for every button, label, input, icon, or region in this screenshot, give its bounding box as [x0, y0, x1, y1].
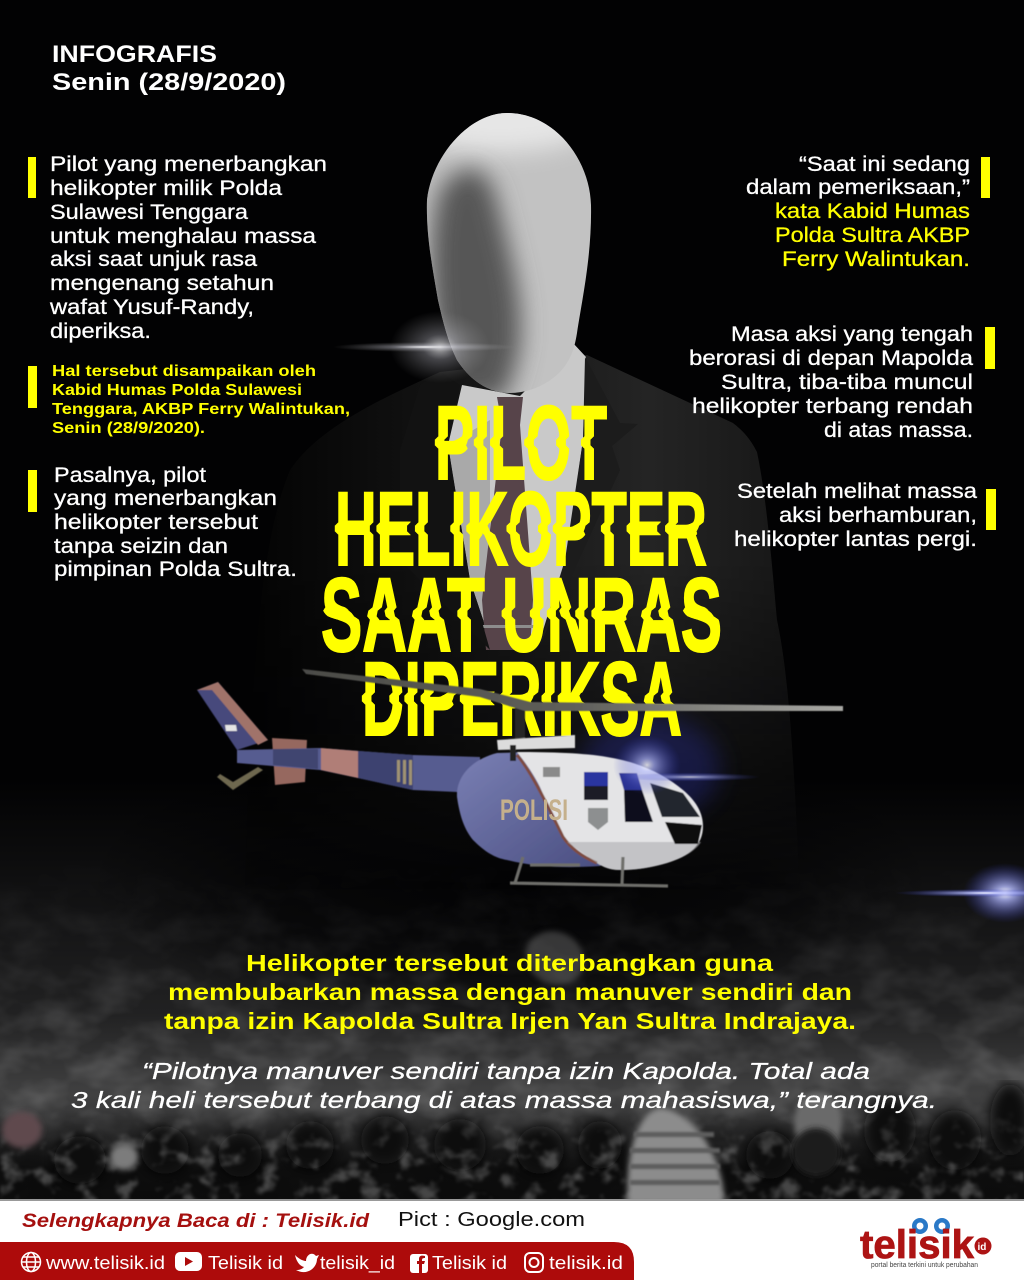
right text block 2: di atas massa. — [824, 419, 973, 442]
footer panel — [0, 1199, 1024, 1280]
right text block 3: Setelah melihat massa — [737, 480, 977, 503]
right text block 3: aksi berhamburan, — [779, 504, 977, 527]
vent and crest — [543, 767, 560, 777]
social bar — [0, 1242, 634, 1280]
main title: HELIKOPTER — [335, 471, 707, 588]
footer panel: telisik.id — [549, 1253, 623, 1273]
left text block 3: pimpinan Polda Sultra. — [54, 558, 297, 581]
left text block 2 yellow — [28, 363, 350, 437]
footer panel: Telisik id — [432, 1253, 507, 1273]
telisik logo: telisik — [860, 1223, 975, 1267]
header: infografis date: INFOGRAFIS — [52, 41, 217, 68]
lapel right — [540, 357, 638, 645]
helicopter blue flare — [613, 735, 760, 795]
telisik logo: id — [978, 1242, 986, 1253]
left text block 2 yellow: Senin (28/9/2020). — [52, 420, 205, 437]
icon: globe — [21, 1252, 41, 1272]
belly shade — [567, 842, 701, 870]
lens flare near head — [333, 311, 517, 383]
faceless head — [426, 113, 592, 393]
tie clip — [482, 625, 534, 628]
right text block 2: Sultra, tiba-tiba muncul — [721, 371, 973, 394]
fuselage stripe — [517, 755, 597, 863]
right text block 2 — [689, 323, 995, 442]
windows — [584, 772, 608, 786]
left text block 1: wafat Yusuf-Randy, — [49, 296, 254, 319]
blue flare right edge — [895, 863, 1024, 923]
bottom italic quote: “Pilotnya manuver sendiri tanpa izin Kapolda. Total ada — [142, 1058, 870, 1084]
lapel left — [400, 372, 490, 650]
bottom italic quote: 3 kali heli tersebut terbang di atas massa mahasiswa,” terangnya. — [71, 1087, 937, 1113]
right text block 3: helikopter lantas pergi. — [734, 528, 977, 551]
left text block 1: untuk menghalau massa — [50, 225, 316, 248]
rotor blade — [302, 669, 843, 711]
left text block 1 — [28, 153, 327, 343]
bottom italic quote — [71, 1058, 937, 1113]
icon: twitter — [295, 1254, 319, 1272]
left text block 3 — [28, 464, 297, 581]
right text block 3 — [734, 480, 996, 551]
right text block 1 quote: Polda Sultra AKBP — [775, 224, 970, 247]
footer panel: Telisik id — [208, 1253, 283, 1273]
tail fin — [197, 682, 268, 750]
left text block 1: helikopter milik Polda — [50, 177, 282, 200]
bottom yellow statement: tanpa izin Kapolda Sultra Irjen Yan Sultra Indrajaya. — [164, 1008, 856, 1034]
left text block 2 yellow: Tenggara, AKBP Ferry Walintukan, — [52, 401, 350, 418]
header: infografis date — [52, 41, 286, 96]
helicopter illustration — [197, 669, 843, 886]
right text block 2: helikopter terbang rendah — [692, 395, 973, 418]
left text block 2 yellow: Kabid Humas Polda Sulawesi — [52, 382, 302, 399]
left text block 1: Sulawesi Tenggara — [50, 201, 248, 224]
telisik logo: portal berita terkini untuk perubahan — [871, 1262, 978, 1269]
footer panel: telisik_id — [320, 1253, 395, 1274]
main title: PILOT — [435, 385, 607, 502]
left text block 1: aksi saat unjuk rasa — [50, 248, 257, 271]
right text block 1 quote: “Saat ini sedang — [799, 153, 970, 176]
left text block 1: mengenang setahun — [50, 272, 274, 295]
bottom yellow statement — [164, 950, 856, 1034]
read more link: Selengkapnya Baca di : Telisik.id — [22, 1211, 369, 1232]
bottom yellow statement: membubarkan massa dengan manuver sendiri dan — [168, 979, 852, 1005]
icon: facebook — [410, 1254, 428, 1273]
left text block 3: yang menerbangkan — [54, 487, 277, 510]
white nose — [517, 752, 703, 870]
main title — [321, 385, 722, 758]
footer panel: www.telisik.id — [45, 1253, 165, 1273]
main title: DIPERIKSA — [362, 641, 682, 758]
rotor mast — [515, 708, 525, 738]
crowd photo background — [0, 842, 1024, 1199]
left text block 1: diperiksa. — [50, 320, 151, 343]
suit jacket — [336, 355, 793, 792]
icon: instagram — [525, 1253, 543, 1272]
POLISI label: POLISI — [500, 794, 568, 827]
right text block 1 quote: dalam pemeriksaan,” — [746, 176, 970, 199]
left text block 3: helikopter tersebut — [54, 511, 258, 534]
left text block 2 yellow: Hal tersebut disampaikan oleh — [52, 363, 316, 380]
cabin top — [497, 735, 575, 750]
stabilizer — [272, 738, 307, 785]
icon: youtube — [175, 1252, 202, 1271]
person in suit — [245, 92, 800, 900]
shirt — [448, 343, 586, 640]
right text block 1 quote — [746, 153, 990, 271]
right text block 2: Masa aksi yang tengah — [731, 323, 973, 346]
tail boom — [237, 748, 480, 795]
right text block 1 quote: kata Kabid Humas — [775, 200, 970, 223]
right text block 1 quote: Ferry Walintukan. — [782, 248, 970, 271]
skids — [510, 857, 668, 886]
left text block 1: Pilot yang menerbangkan — [50, 153, 327, 176]
right text block 2: berorasi di depan Mapolda — [689, 347, 973, 370]
tie — [482, 397, 533, 650]
tail skid — [217, 767, 263, 790]
helicopter blue glow — [580, 716, 720, 820]
header: infografis date: Senin (28/9/2020) — [52, 69, 286, 96]
main title: SAAT UNRAS — [321, 557, 722, 674]
left text block 3: tanpa seizin dan — [54, 535, 228, 558]
picture credit: Pict : Google.com — [398, 1209, 585, 1231]
shirt shade left — [448, 420, 490, 640]
logo eyes — [912, 1218, 950, 1234]
blue fuselage — [457, 752, 610, 867]
left text block 3: Pasalnya, pilot — [54, 464, 206, 487]
bottom yellow statement: Helikopter tersebut diterbangkan guna — [246, 950, 773, 976]
